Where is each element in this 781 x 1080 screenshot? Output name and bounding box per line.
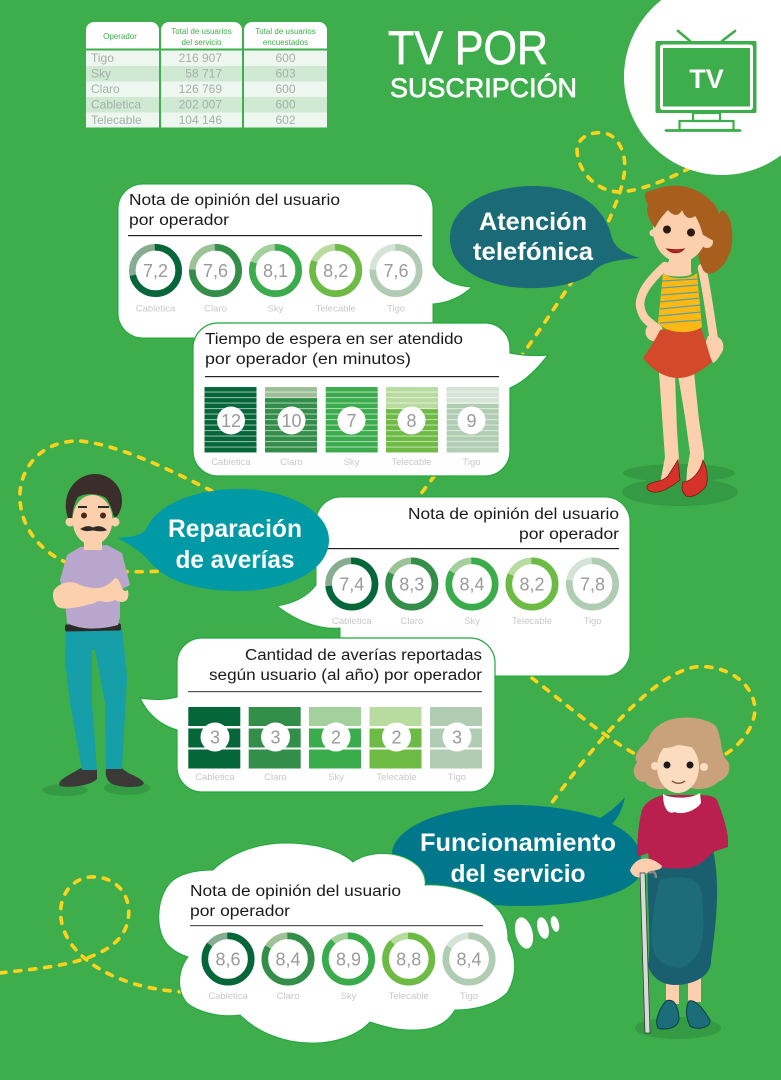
table body: 600 [275,98,296,112]
title: SUSCRIPCIÓN [390,72,577,103]
bar: Claro 10: Claro [280,457,303,468]
blocks: Telecable 2: 2 [391,728,402,748]
table header: Total de usuarios [255,27,316,36]
donut: Claro 7,6: 7,6 [203,261,228,281]
donut: Telecable 8,8: 8,8 [396,950,421,970]
table body [86,50,327,128]
donut: Cabletica 7,4 [329,561,375,627]
donut: Tigo 7,6: Tigo [387,304,405,314]
heading [205,331,499,377]
heading: según usuario (al año) por operador [209,667,482,684]
table body: 600 [275,82,296,96]
bar: Telecable 8: 8 [406,411,417,431]
blocks: Sky 2: 2 [331,728,341,748]
bar: Tigo 9 [447,387,499,468]
table body: 602 [275,113,296,127]
blocks: Telecable 2: Telecable [376,772,417,783]
donut: Sky 8,4: 8,4 [459,574,485,594]
bar: Sky 7: Sky [344,457,360,468]
donut: Cabletica 7,2: Cabletica [136,304,176,314]
blocks: Sky 2 [309,707,361,783]
donut: Tigo 8,4: 8,4 [456,950,482,970]
icon: TV [656,31,756,130]
donut: Tigo 8,4 [446,936,492,1002]
donut: Telecable 8,8: Telecable [389,991,429,1002]
heading: Tiempo de espera en ser atendido [205,331,463,348]
heading: por operador (en minutos) [205,351,411,368]
heading: por operador [129,212,229,229]
donut: Sky 8,1: 8,1 [263,261,288,281]
table body: 216 907 [179,51,222,65]
donut: Tigo 7,8: Tigo [583,616,602,627]
heading: Cantidad de averías reportadas [245,647,482,664]
donut: Claro 7,6: Claro [204,304,227,314]
speech bubble: Atención telefónica [450,186,640,288]
table body: 58 717 [185,66,222,80]
table body: Claro [91,82,120,96]
table header [86,22,327,48]
table body: 603 [275,66,296,80]
donut: Sky 8,1: Sky [268,304,284,314]
speech bubble: Atención telefónica: Atención [479,208,587,236]
speech bubble: Reparación de averías [118,489,329,591]
donut: Tigo 8,4: Tigo [460,991,478,1002]
donut: Sky 8,9: 8,9 [336,950,361,970]
blocks: Claro 3: 3 [270,728,281,748]
icon: TV: TV [689,64,724,94]
donut: Claro 8,4: 8,4 [275,950,301,970]
donut: Telecable 8,2: Telecable [512,616,552,627]
donut: Telecable 8,2: Telecable [316,304,356,314]
bar: Claro 10: 10 [281,411,302,431]
corner circle with TV icon [624,0,781,175]
blocks: Cabletica 3 [188,707,240,783]
dashed path: top right loop [420,133,690,495]
bar: Cabletica 12 [204,387,256,468]
bar: Telecable 8 [386,387,438,468]
donut: Telecable 8,2: 8,2 [323,261,348,281]
table body: 600 [275,51,296,65]
table: operadores [86,22,327,128]
donut: Cabletica 7,4: 7,4 [339,574,364,594]
character: grandmother [630,717,729,1039]
bar: Cabletica 12: 12 [221,411,241,431]
heading: Nota de opinión del usuario [408,506,619,523]
donut: Telecable 8,2 [312,247,359,314]
bar: Tigo 9: Tigo [462,457,481,468]
bar: Tigo 9: 9 [466,411,477,431]
title [388,21,577,103]
table body: Telecable [91,113,142,127]
bar: Claro 10 [265,387,317,468]
heading: por operador [519,526,619,543]
speech bubble: Funcionamiento del servicio [392,797,641,906]
speech bubble: Reparación de averías: Reparación [168,515,302,543]
table header: encuestados [263,38,308,47]
donut: Cabletica 8,6 [205,936,251,1002]
blocks: Claro 3: Claro [264,772,287,783]
donut: Cabletica 7,2 [132,247,179,314]
donut: Claro 8,3: 8,3 [399,574,424,594]
table body: 126 769 [179,82,222,96]
donut: Sky 8,9: Sky [341,991,357,1002]
dashed path: right loop [532,667,755,808]
bar: Sky 7: 7 [346,411,357,431]
blocks: Tigo 3: 3 [452,728,462,748]
heading [190,883,483,926]
donut: Telecable 8,8 [386,936,432,1002]
donut: Claro 8,4: Claro [277,991,299,1002]
donut: Sky 8,1 [252,247,299,314]
donut: Sky 8,9 [325,936,372,1002]
donut: Claro 8,3: Claro [400,616,423,627]
speech bubble: Reparación de averías: de averías [176,546,294,574]
panel: tiempo de espera [193,323,548,476]
table body: 202 007 [179,98,222,112]
table body: Tigo [91,51,114,65]
dashed path: bottom left loop [0,877,185,992]
donut: Tigo 7,6 [373,247,419,314]
blocks: Tigo 3: Tigo [448,772,466,783]
panel: nota de opinión, reparación [277,497,630,676]
donut: Sky 8,4 [449,561,495,627]
heading: Nota de opinión del usuario [190,883,401,900]
speech bubble: Funcionamiento del servicio: Funcionamiento [420,829,616,857]
panel: cantidad de averías [140,638,495,792]
heading [325,506,619,549]
blocks: Cabletica 3: Cabletica [195,772,236,783]
blocks: Telecable 2 [370,707,422,783]
character: girl [622,186,738,506]
blocks: Tigo 3 [430,707,482,783]
donut: Cabletica 8,6: Cabletica [208,991,249,1002]
table body: 104 146 [179,113,222,127]
bar: Telecable 8: Telecable [391,457,432,468]
donut: Claro 8,3 [389,561,435,627]
speech bubble: Atención telefónica: telefónica [473,238,594,266]
donut: Telecable 8,2: 8,2 [519,574,545,594]
table header: del servicio [181,38,222,47]
table body: Cabletica [91,98,141,112]
blocks: Claro 3 [249,707,301,783]
heading [128,192,422,236]
thought dots [512,915,561,951]
bar: Sky 7 [326,387,378,468]
heading [188,647,482,692]
donut: Cabletica 7,2: 7,2 [143,261,168,281]
speech bubble: Funcionamiento del servicio: del servicio [450,860,586,888]
character: man [42,474,150,796]
table header: Total de usuarios [171,27,232,36]
donut: Tigo 7,8 [569,561,616,627]
thought cloud panel [159,843,561,1043]
dashed path: left loop [20,441,212,572]
panel: nota de opinión, atención telefónica [118,184,472,338]
donut: Telecable 8,2 [509,561,555,627]
donut: Tigo 7,6: 7,6 [383,261,409,281]
blocks: Cabletica 3: 3 [210,728,220,748]
bar: Cabletica 12: Cabletica [211,457,252,468]
donut: Tigo 7,8: 7,8 [580,574,605,594]
heading: Nota de opinión del usuario [129,192,340,209]
donut: Claro 8,4 [265,936,311,1002]
blocks: Sky 2: Sky [328,772,344,783]
table body: Sky [91,66,111,80]
donut: Cabletica 8,6: 8,6 [215,950,241,970]
donut: Cabletica 7,4: Cabletica [332,616,372,627]
heading: por operador [190,903,290,920]
table header: Operador [103,32,137,41]
donut: Sky 8,4: Sky [464,616,480,627]
donut: Claro 7,6 [192,247,239,314]
title: TV POR [388,21,548,74]
